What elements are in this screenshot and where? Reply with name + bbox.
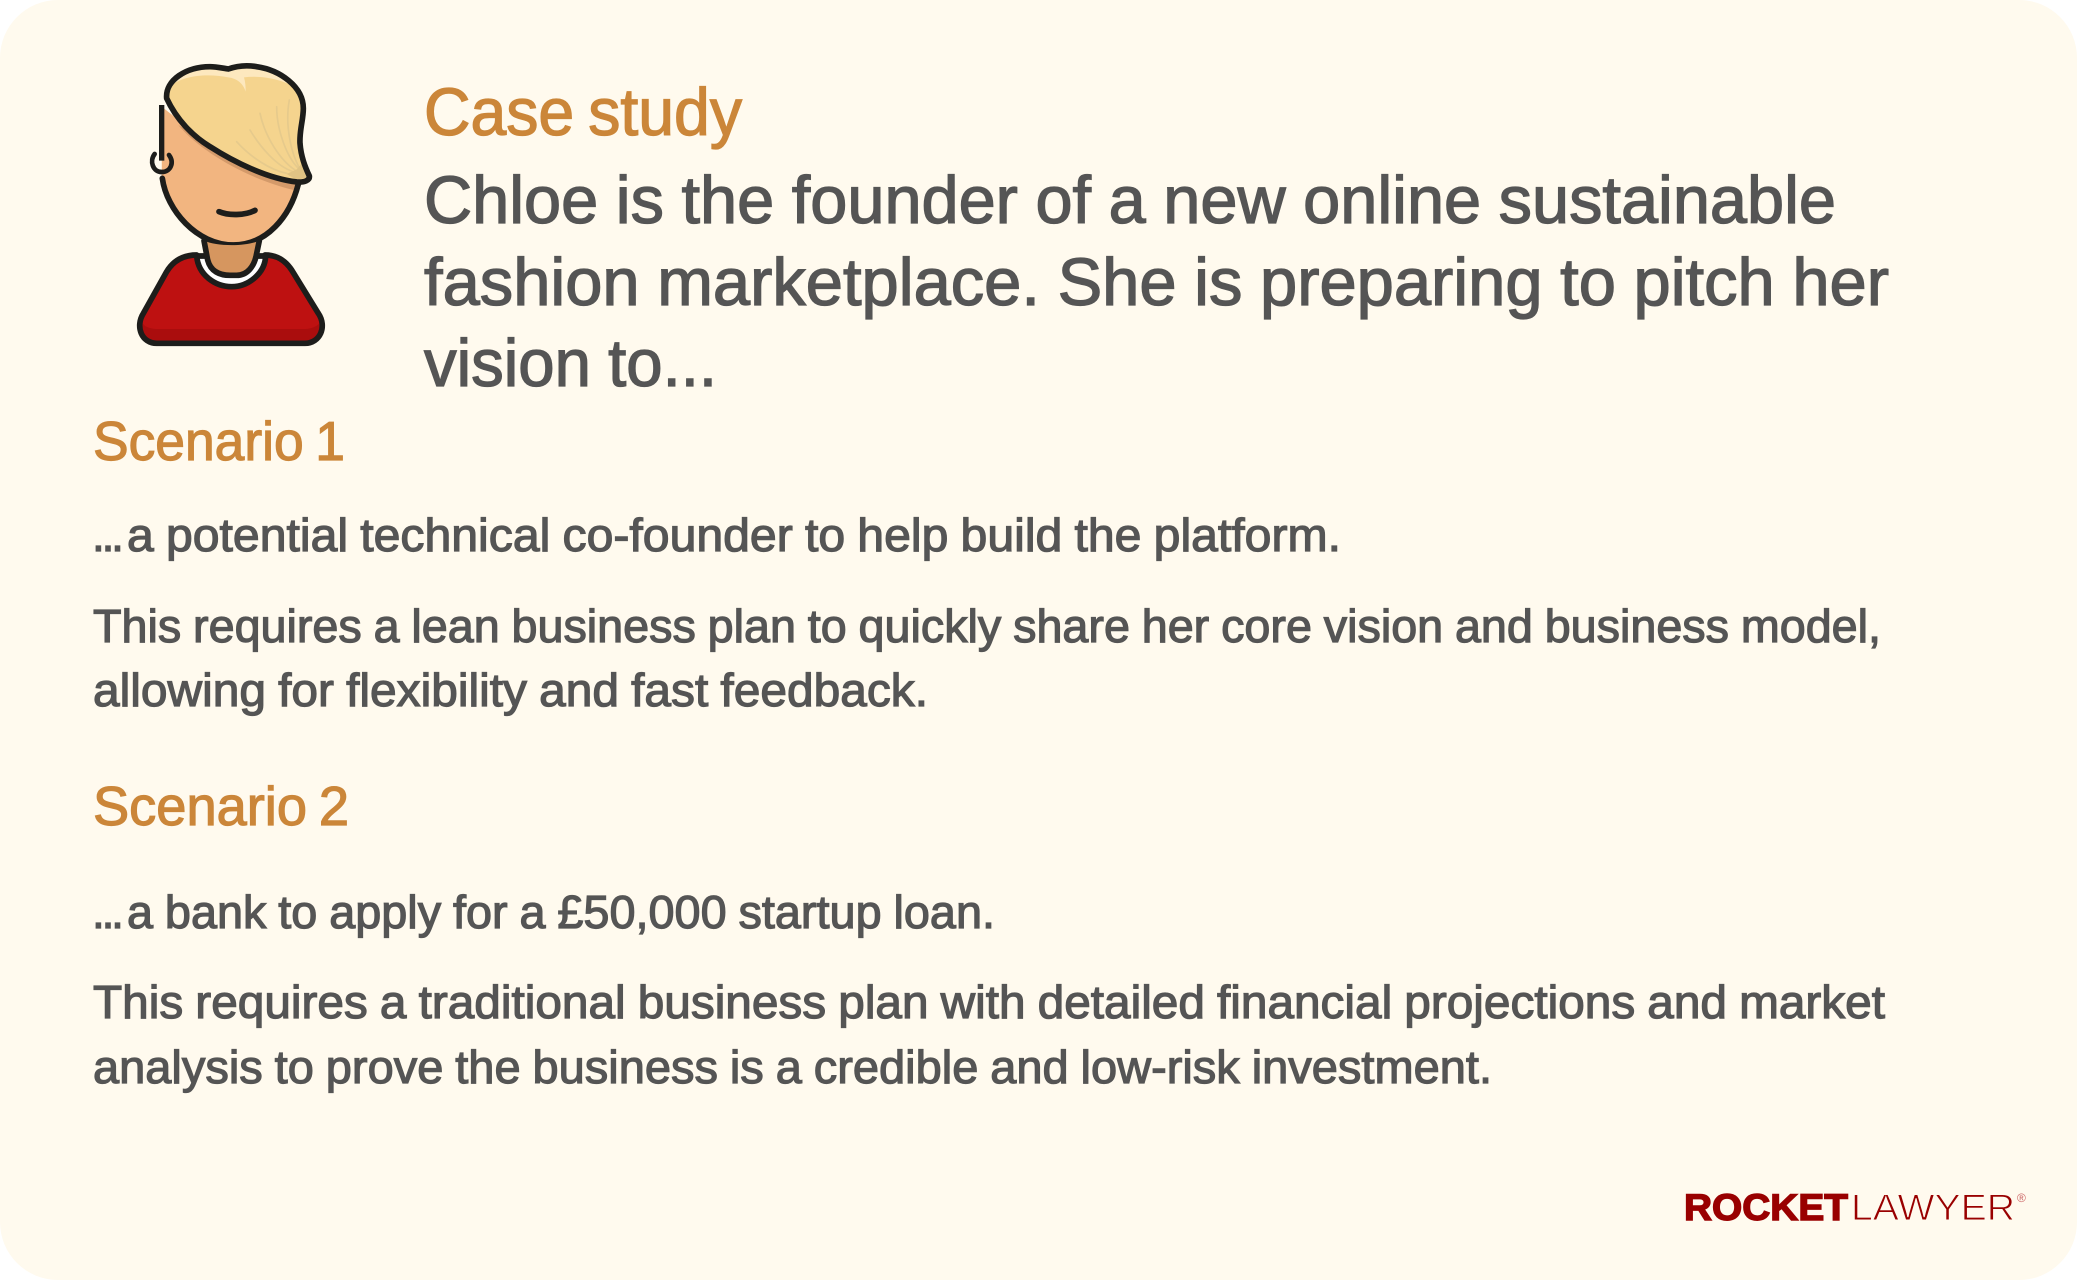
text block: case study intro: vision to... — [424, 326, 717, 401]
text block: case study intro — [424, 163, 1889, 401]
text block: case study intro: fashion marketplace. She is preparing to pitch her — [424, 245, 1889, 320]
text block: scenario 1 audience: ... — [92, 509, 121, 561]
text block: scenario 2 audience: ... — [92, 886, 121, 938]
heading: Case study: Case study — [424, 75, 742, 150]
logo: Rocket Lawyer: LAWYER — [1851, 1187, 2015, 1228]
text block: case study intro: Chloe is the founder of a new online sustainable — [424, 163, 1836, 238]
text block: scenario 2 audience: a bank to apply for a £50,000 startup loan. — [127, 886, 995, 938]
text block: scenario 2 description: analysis to prove the business is a credible and low-risk investment. — [93, 1041, 1492, 1093]
text block: scenario 1 description — [93, 600, 1881, 716]
heading: Scenario 1: Scenario 1 — [93, 410, 345, 472]
logo: Rocket Lawyer — [1684, 1187, 2026, 1228]
text block: scenario 1 audience: a potential technical co-founder to help build the platform. — [127, 509, 1341, 561]
logo: Rocket Lawyer: ® — [2017, 1191, 2026, 1205]
text block: scenario 1 description: This requires a lean business plan to quickly share her core vision and business model, — [93, 600, 1881, 652]
text block: scenario 1 description: allowing for flexibility and fast feedback. — [93, 664, 928, 716]
icon: Chloe avatar — [140, 66, 322, 343]
text block: scenario 2 description: This requires a traditional business plan with detailed financial projections and market — [93, 976, 1885, 1028]
heading: Scenario 2: Scenario 2 — [93, 775, 349, 837]
text block: scenario 2 description — [93, 976, 1885, 1093]
logo: Rocket Lawyer: ROCKET — [1684, 1187, 1848, 1228]
